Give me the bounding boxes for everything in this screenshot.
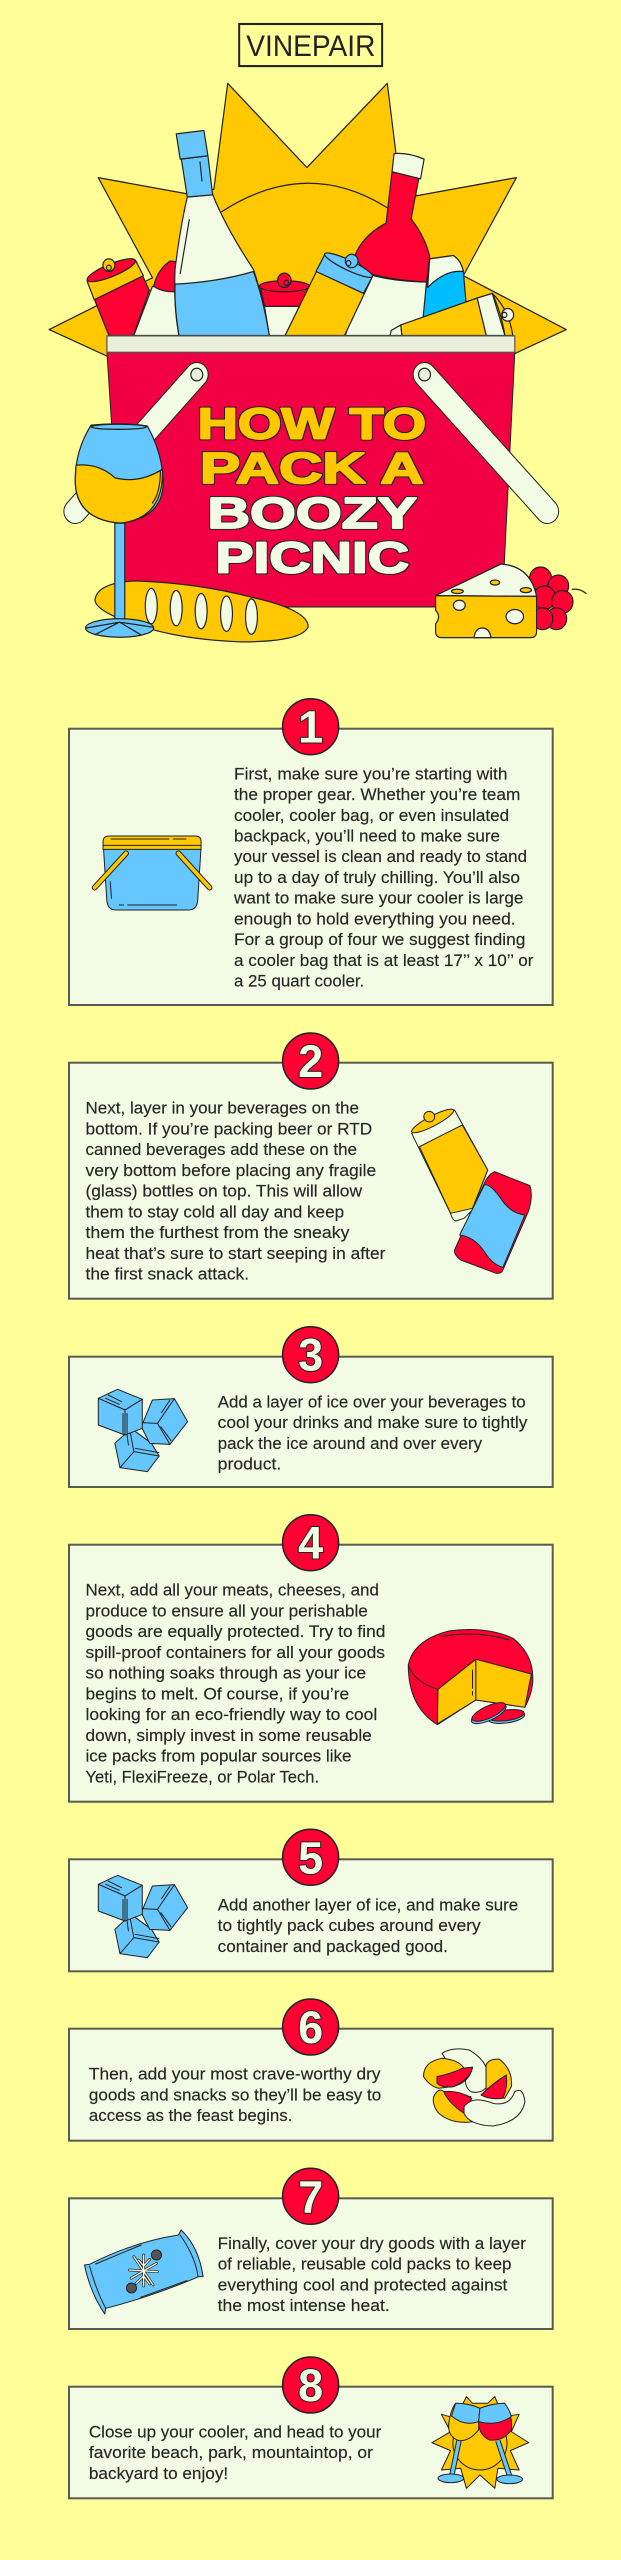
text: step 4: begins to melt. Of course, if you’re [86, 1684, 349, 1703]
text: step 8: Close up your cooler, and head to your [89, 2422, 382, 2441]
icon: ice cubes [98, 1389, 188, 1472]
cheese wedge [436, 564, 537, 638]
text: step 2: bottom. If you’re packing beer or RTD [86, 1119, 372, 1138]
text: step 3 [218, 1392, 528, 1474]
icon: snacks [423, 2049, 525, 2126]
number badge 3: 3 [298, 1330, 323, 1381]
text: step 5: container and packaged good. [218, 1937, 448, 1956]
panel: step 4 [69, 1515, 553, 1802]
icon: cold pack [84, 2230, 203, 2314]
text: step 7: everything cool and protected against [218, 2276, 508, 2294]
text: step 5: to tightly pack cubes around every [218, 1916, 481, 1935]
panel: step 3 [69, 1327, 553, 1487]
text: step 2 [86, 1099, 386, 1284]
number badge 7 [283, 2168, 339, 2224]
text: step 4 [86, 1581, 385, 1786]
number badge 4: 4 [298, 1518, 323, 1569]
text: step 1: up to a day of truly chilling. You’ll also [234, 868, 520, 887]
title: HOW TO [198, 400, 426, 449]
logo: VINEPAIR [246, 30, 375, 63]
title: BOOZY [208, 490, 417, 538]
picnic basket [107, 336, 515, 607]
panel: step 8 [69, 2357, 553, 2498]
text: step 1: For a group of four we suggest finding [234, 930, 525, 949]
text: step 2: them to stay cold all day and keep [86, 1202, 344, 1221]
text: step 8: favorite beach, park, mountaintop, or [89, 2443, 373, 2462]
number badge 8 [283, 2357, 339, 2413]
panel: step 6 [69, 1999, 553, 2141]
text: step 6 [89, 2065, 381, 2125]
text: step 6: goods and snacks so they’ll be easy to [89, 2085, 381, 2104]
text: step 4: ice packs from popular sources like [86, 1746, 352, 1766]
text: step 2: Next, layer in your beverages on the [86, 1099, 359, 1118]
number badge 2: 2 [298, 1036, 323, 1087]
number badge 5 [283, 1829, 339, 1885]
text: step 2: heat that’s sure to start seeping in after [86, 1244, 386, 1263]
number badge 3 [283, 1327, 339, 1383]
text: step 5 [218, 1895, 518, 1956]
text: step 7: the most intense heat. [218, 2296, 390, 2315]
text: step 3: cool your drinks and make sure to tightly [218, 1413, 528, 1432]
text: step 4: Yeti, FlexiFreeze, or Polar Tech. [86, 1767, 319, 1786]
text: step 1: the proper gear. Whether you’re team [234, 785, 520, 804]
text: step 4: looking for an eco-friendly way to cool [86, 1705, 377, 1724]
text: step 6: Then, add your most crave-worthy dry [89, 2065, 381, 2084]
icon: cheese wheel [408, 1630, 533, 1728]
text: step 4: spill-proof containers for all your goods [86, 1643, 385, 1662]
hero illustration [49, 24, 586, 642]
panel: step 5 [69, 1829, 553, 1971]
wine glass [75, 424, 163, 637]
text: step 4: goods are equally protected. Try to find [86, 1622, 385, 1641]
text: step 1: backpack, you’ll need to make sure [234, 826, 500, 846]
text: step 4: so nothing soaks through as your ice [86, 1664, 366, 1683]
basket handles [75, 368, 547, 511]
number badge 4 [283, 1515, 339, 1571]
title: PACK A [200, 445, 424, 493]
number badge 6 [283, 1999, 339, 2055]
text: step 2: them the furthest from the sneaky [86, 1223, 350, 1242]
text: step 8: backyard to enjoy! [89, 2464, 228, 2483]
text: step 4: down, simply invest in some reusable [86, 1726, 372, 1745]
text: step 3: Add a layer of ice over your beverages to [218, 1392, 526, 1411]
sunburst [49, 83, 566, 356]
text: step 7: Finally, cover your dry goods with a layer [218, 2234, 526, 2253]
icon: toasting glasses and sun [432, 2397, 529, 2488]
text: step 4: produce to ensure all your perishable [86, 1601, 368, 1620]
text: step 2: canned beverages add these on the [86, 1140, 357, 1159]
text: step 1: want to make sure your cooler is large [233, 889, 523, 908]
panel: step 1 [69, 699, 553, 1005]
panel: step 7 [69, 2168, 553, 2329]
panel: step 2 [69, 1033, 553, 1299]
text: step 7 [218, 2234, 526, 2315]
text: step 1 [233, 764, 534, 991]
text: step 1: your vessel is clean and ready to stand [234, 847, 527, 866]
baguette [95, 581, 308, 642]
title [198, 400, 426, 583]
number badge 5: 5 [298, 1832, 323, 1883]
text: step 5: Add another layer of ice, and make sure [218, 1895, 518, 1914]
number badge 6: 6 [298, 2002, 323, 2053]
text: step 3: pack the ice around and over every [218, 1434, 483, 1453]
number badge 7: 7 [298, 2171, 323, 2222]
text: step 2: (glass) bottles on top. This will allow [86, 1182, 363, 1201]
number badge 1 [283, 699, 339, 755]
text: step 2: very bottom before placing any fragile [86, 1161, 376, 1180]
text: step 8 [89, 2422, 382, 2483]
number badge 1: 1 [298, 702, 323, 753]
grapes [529, 567, 586, 630]
number badge 2 [283, 1033, 339, 1089]
text: step 1: a 25 quart cooler. [234, 972, 364, 991]
text: step 6: access as the feast begins. [89, 2106, 292, 2125]
text: step 1: enough to hold everything you need. [234, 909, 516, 928]
text: step 1: cooler, cooler bag, or even insulated [234, 806, 509, 825]
text: step 3: product. [218, 1454, 281, 1474]
text: step 4: Next, add all your meats, cheeses, and [86, 1581, 379, 1600]
title: PICNIC [215, 534, 409, 583]
text: step 2: the first snack attack. [86, 1264, 249, 1284]
icon: cooler [95, 836, 210, 910]
icon: ice cubes [98, 1875, 188, 1958]
text: step 7: of reliable, reusable cold packs to keep [218, 2255, 511, 2274]
number badge 8: 8 [298, 2360, 323, 2411]
text: step 1: a cooler bag that is at least 17’’ x 10’’ or [234, 951, 534, 970]
bottles and cans [85, 130, 514, 335]
icon: cans [409, 1106, 531, 1273]
logo [239, 24, 382, 66]
text: step 1: First, make sure you’re starting with [234, 764, 508, 783]
